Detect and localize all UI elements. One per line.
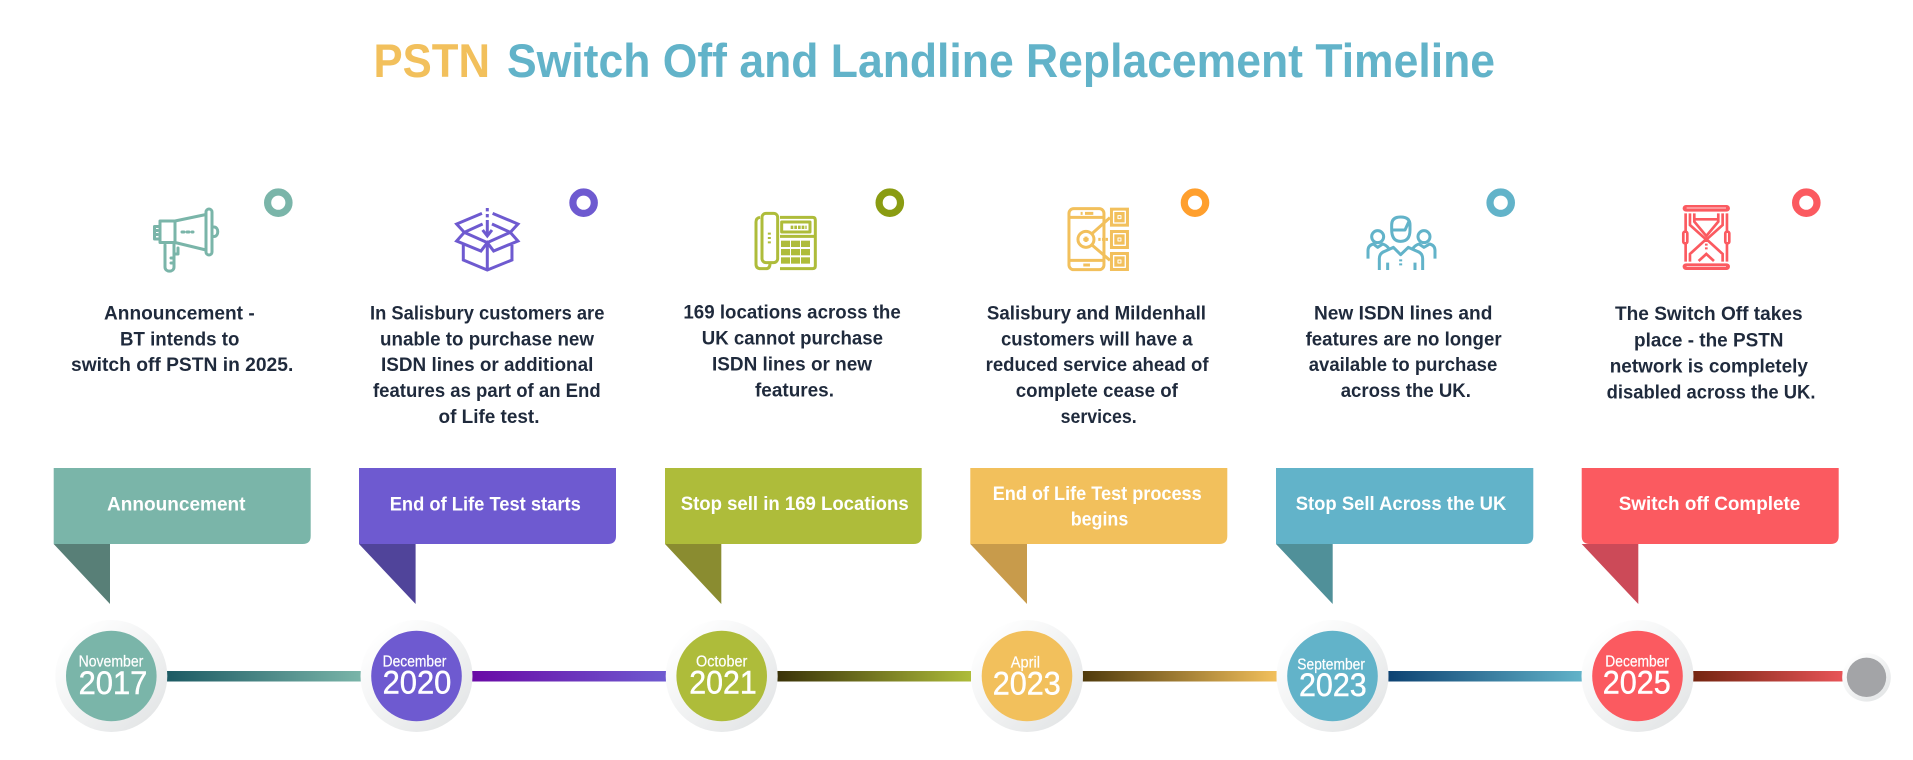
description text: network is completely [1610,355,1808,377]
step 1: November 2017 announcement [54,192,361,732]
banner: Stop sell in 169 Locations [665,468,922,604]
date circle: December 2025: December [1605,654,1669,671]
description text: reduced service ahead of [986,354,1209,376]
step 3: October 2021 stop sell [665,192,971,732]
ring marker [1796,192,1817,213]
icon: megaphone [154,209,218,271]
step 5: September 2023 stop sell across UK [1276,192,1582,732]
description text: complete cease of [1016,380,1178,402]
icon: hourglass [1683,205,1730,270]
ring marker [1184,192,1206,213]
connector bar [167,671,361,682]
description text: ISDN lines or new [712,353,873,375]
date circle: October 2021 [666,620,778,732]
description text: place - the PSTN [1634,329,1784,351]
connector bar [1388,671,1582,682]
date circle: December 2020: December [383,654,446,671]
description text: customers will have a [1001,328,1193,350]
date circle: April 2023: April [1011,655,1040,672]
date circle: October 2021: October [696,654,747,671]
description text: BT intends to [120,328,239,350]
description text: The Switch Off takes [1615,303,1803,325]
ring marker [1490,192,1511,213]
date circle: December 2025 [1582,620,1694,732]
date circle: December 2020: 2020 [383,664,451,700]
banner: Announcement [54,468,311,604]
banner: End of Life Test process begins [970,468,1227,604]
date circle: September 2023 [1276,620,1388,732]
description text [1607,303,1816,403]
description text: services. [1061,406,1137,428]
description text: UK cannot purchase [702,328,883,350]
title: PSTN [374,34,490,87]
ring marker [573,192,594,213]
description text [1306,302,1502,402]
connector bar [472,671,666,682]
title: Switch Off and Landline Replacement Timeline [507,34,1495,87]
banner: Stop Sell Across the UK [1276,468,1533,604]
date circle: November 2017: November [79,654,143,671]
connector bar [777,671,971,682]
banner: Stop sell in 169 Locations: Stop sell in 169 Locations [681,493,909,515]
description text: 169 locations across the [683,301,901,323]
step 6: December 2025 switch off complete [1582,192,1842,732]
icon: phone with connected modules [1069,208,1129,271]
step 2: December 2020 end of life test [359,192,666,732]
description text: New ISDN lines and [1314,302,1492,324]
description text [683,301,901,401]
description text: unable to purchase new [380,328,595,350]
description text [71,302,293,376]
date circle: September 2023: September [1297,656,1365,673]
date circle: December 2025: 2025 [1603,664,1671,700]
description text: In Salisbury customers are [370,302,605,324]
description text: features. [755,379,834,401]
description text [986,302,1209,428]
description text: Announcement - [104,302,255,324]
description text: features as part of an End [373,380,601,402]
date circle: April 2023 [971,620,1083,732]
banner: Stop Sell Across the UK: Stop Sell Across the UK [1296,493,1506,515]
icon: open box with arrow [457,208,518,270]
date circle: April 2023: 2023 [993,665,1061,701]
banner: Switch off Complete: Switch off Complete [1619,493,1800,515]
description text: available to purchase [1309,354,1497,376]
banner: Switch off Complete [1582,468,1839,604]
description text: across the UK. [1341,380,1471,402]
description text [370,302,605,428]
description text: Salisbury and Mildenhall [987,302,1206,324]
ring marker [268,192,289,213]
description text: ISDN lines or additional [381,354,593,376]
description text: switch off PSTN in 2025. [71,354,293,376]
date circle: December 2020 [360,620,472,732]
connector bar [1083,671,1277,682]
banner: Announcement: Announcement [107,494,246,516]
icon: group of people [1368,217,1435,270]
date circle: November 2017: 2017 [79,665,147,701]
connector bar [1693,671,1842,682]
banner: End of Life Test process begins: begins [1071,509,1128,531]
ring marker [879,192,900,213]
step 4: April 2023 end of life process [970,192,1277,732]
description text: of Life test. [438,406,540,428]
banner: End of Life Test process begins: End of Life Test process [993,483,1202,505]
date circle: November 2017 [55,620,167,732]
banner: End of Life Test starts: End of Life Test starts [390,494,581,516]
description text: features are no longer [1306,328,1502,350]
description text: disabled across the UK. [1607,381,1816,403]
date circle: October 2021: 2021 [689,664,757,700]
banner: End of Life Test starts [359,468,616,604]
date circle: September 2023: 2023 [1299,667,1367,703]
timeline end marker [1842,653,1891,702]
icon: desk telephone [756,213,815,269]
